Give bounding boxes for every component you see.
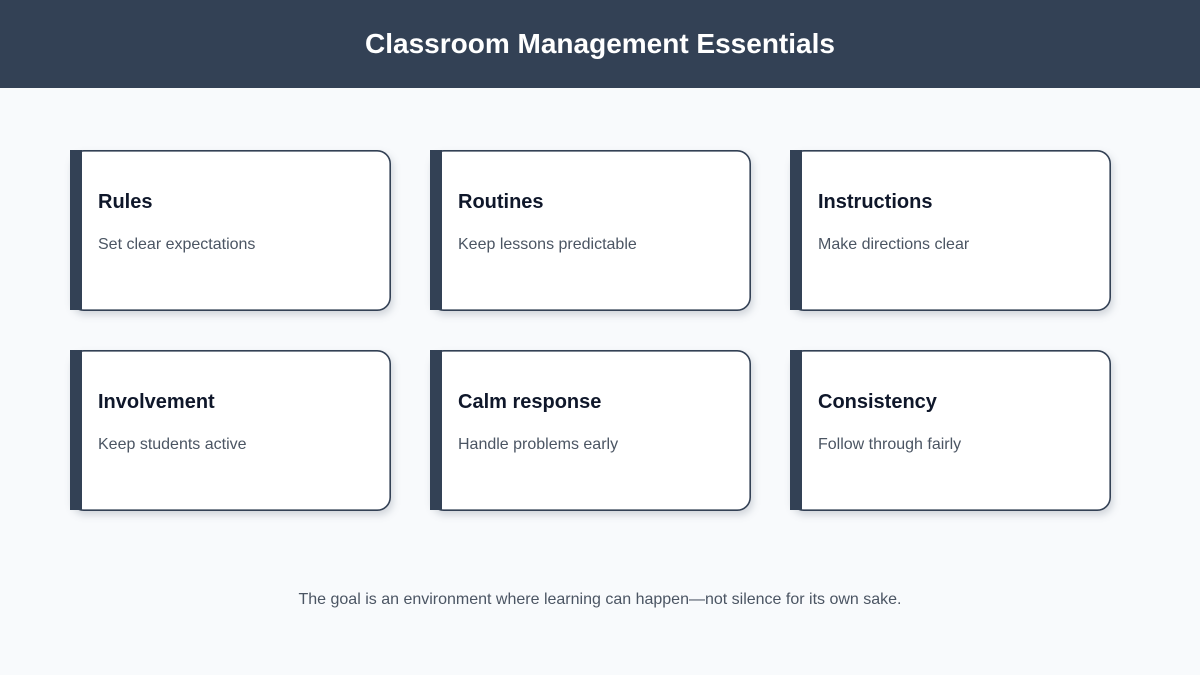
heading: calm response: Calm response <box>458 391 601 413</box>
header band <box>0 0 1200 88</box>
title: Classroom Management Essentials <box>365 28 835 59</box>
panel: involvement <box>69 350 396 518</box>
text: calm response: Handle problems early <box>458 436 618 453</box>
panel: routines <box>429 150 756 318</box>
text: involvement: Keep students active <box>98 436 247 453</box>
text: consistency: Follow through fairly <box>818 436 961 453</box>
footer note: The goal is an environment where learning can happen—not silence for its own sake. <box>298 591 902 608</box>
panel: consistency <box>789 350 1116 518</box>
heading: instructions: Instructions <box>818 191 932 213</box>
text: routines: Keep lessons predictable <box>458 236 637 253</box>
heading: consistency: Consistency <box>818 391 937 413</box>
panel: rules <box>69 150 396 318</box>
text: instructions: Make directions clear <box>818 236 969 253</box>
panel: calm response <box>429 350 756 518</box>
text: rules: Set clear expectations <box>98 236 255 253</box>
panel: instructions <box>789 150 1116 318</box>
heading: routines: Routines <box>458 191 544 213</box>
heading: involvement: Involvement <box>98 391 215 413</box>
heading: rules: Rules <box>98 191 152 213</box>
